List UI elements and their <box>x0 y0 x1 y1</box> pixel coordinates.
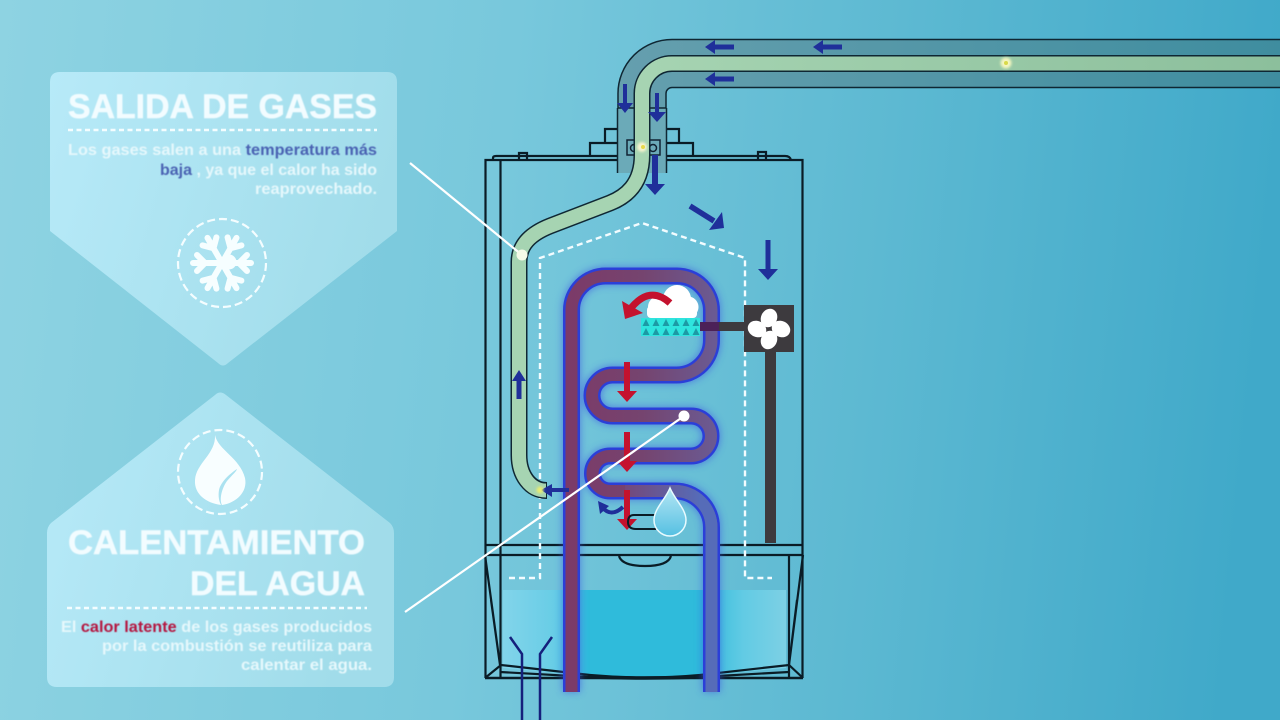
arrow: chamber top <box>645 155 665 195</box>
boiler drawing <box>485 40 1280 720</box>
blue flow arrows <box>512 40 842 514</box>
arrow: pipe inlet <box>541 484 569 497</box>
body text: agua: calentar el agua. <box>241 657 372 674</box>
body text: gases <box>68 142 377 198</box>
panel: calentamiento del agua <box>47 392 394 687</box>
dashed combustion chamber outline <box>509 223 772 578</box>
panel shape: house pointing up <box>47 392 394 687</box>
arrow: right down <box>758 240 778 280</box>
fan duct horizontal <box>700 322 745 331</box>
water tank <box>503 590 786 678</box>
arrow: collar left <box>617 84 633 113</box>
icon: condensation droplets <box>641 318 700 336</box>
icon: water drop <box>654 488 686 536</box>
arrow: red 1 <box>617 362 637 402</box>
panel: salida de gases <box>50 72 397 366</box>
red flow arrows <box>617 362 637 530</box>
body text: gases: baja , ya que el calor ha sido <box>160 162 377 179</box>
body text: gases: Los gases salen a una temperatura más <box>68 142 377 159</box>
body text: agua <box>61 619 372 674</box>
small connection lines near drop <box>628 515 656 529</box>
arrow: red 3 <box>617 490 637 530</box>
heading: salida de gases: SALIDA DE GASES <box>68 88 377 126</box>
icon: flame in dashed circle <box>178 430 262 514</box>
body text: gases: reaprovechado. <box>255 181 377 198</box>
icon: snowflake in dashed circle <box>178 219 266 307</box>
heading: del agua: DEL AGUA <box>190 565 365 603</box>
icon: fan <box>744 305 794 352</box>
arrow: red curved <box>622 295 670 319</box>
arrow: pipe up <box>512 370 526 399</box>
fan duct vertical <box>765 350 776 543</box>
arrow: flue top 1 <box>705 40 734 54</box>
panel shape: pentagon pointing down <box>50 72 397 366</box>
arrow: collar right <box>648 93 666 122</box>
heading underline <box>67 607 367 609</box>
boiler casing <box>485 129 803 678</box>
arrow: small curved <box>598 501 623 514</box>
heat exchanger coil <box>572 276 712 692</box>
flue: outer duct <box>617 64 1280 173</box>
arrow: flue bottom <box>705 72 734 86</box>
heading: calentamiento: CALENTAMIENTO <box>68 524 365 562</box>
leader line: calentamiento del agua <box>405 410 690 612</box>
heading underline <box>68 129 377 131</box>
arrow: red 2 <box>617 432 637 472</box>
leader line: salida de gases <box>410 163 528 260</box>
body text: agua: El calor latente de los gases producidos <box>61 619 372 636</box>
collar fitting <box>627 140 660 155</box>
inlet pipes <box>510 637 552 720</box>
arrow: flue top 2 <box>813 40 842 54</box>
flue: inner exhaust pipe <box>519 64 1280 490</box>
arrow: diagonal <box>690 206 724 230</box>
yellow gas markers <box>536 58 1012 494</box>
icon: cloud <box>647 285 698 318</box>
body text: agua: por la combustión se reutiliza para <box>102 638 372 655</box>
